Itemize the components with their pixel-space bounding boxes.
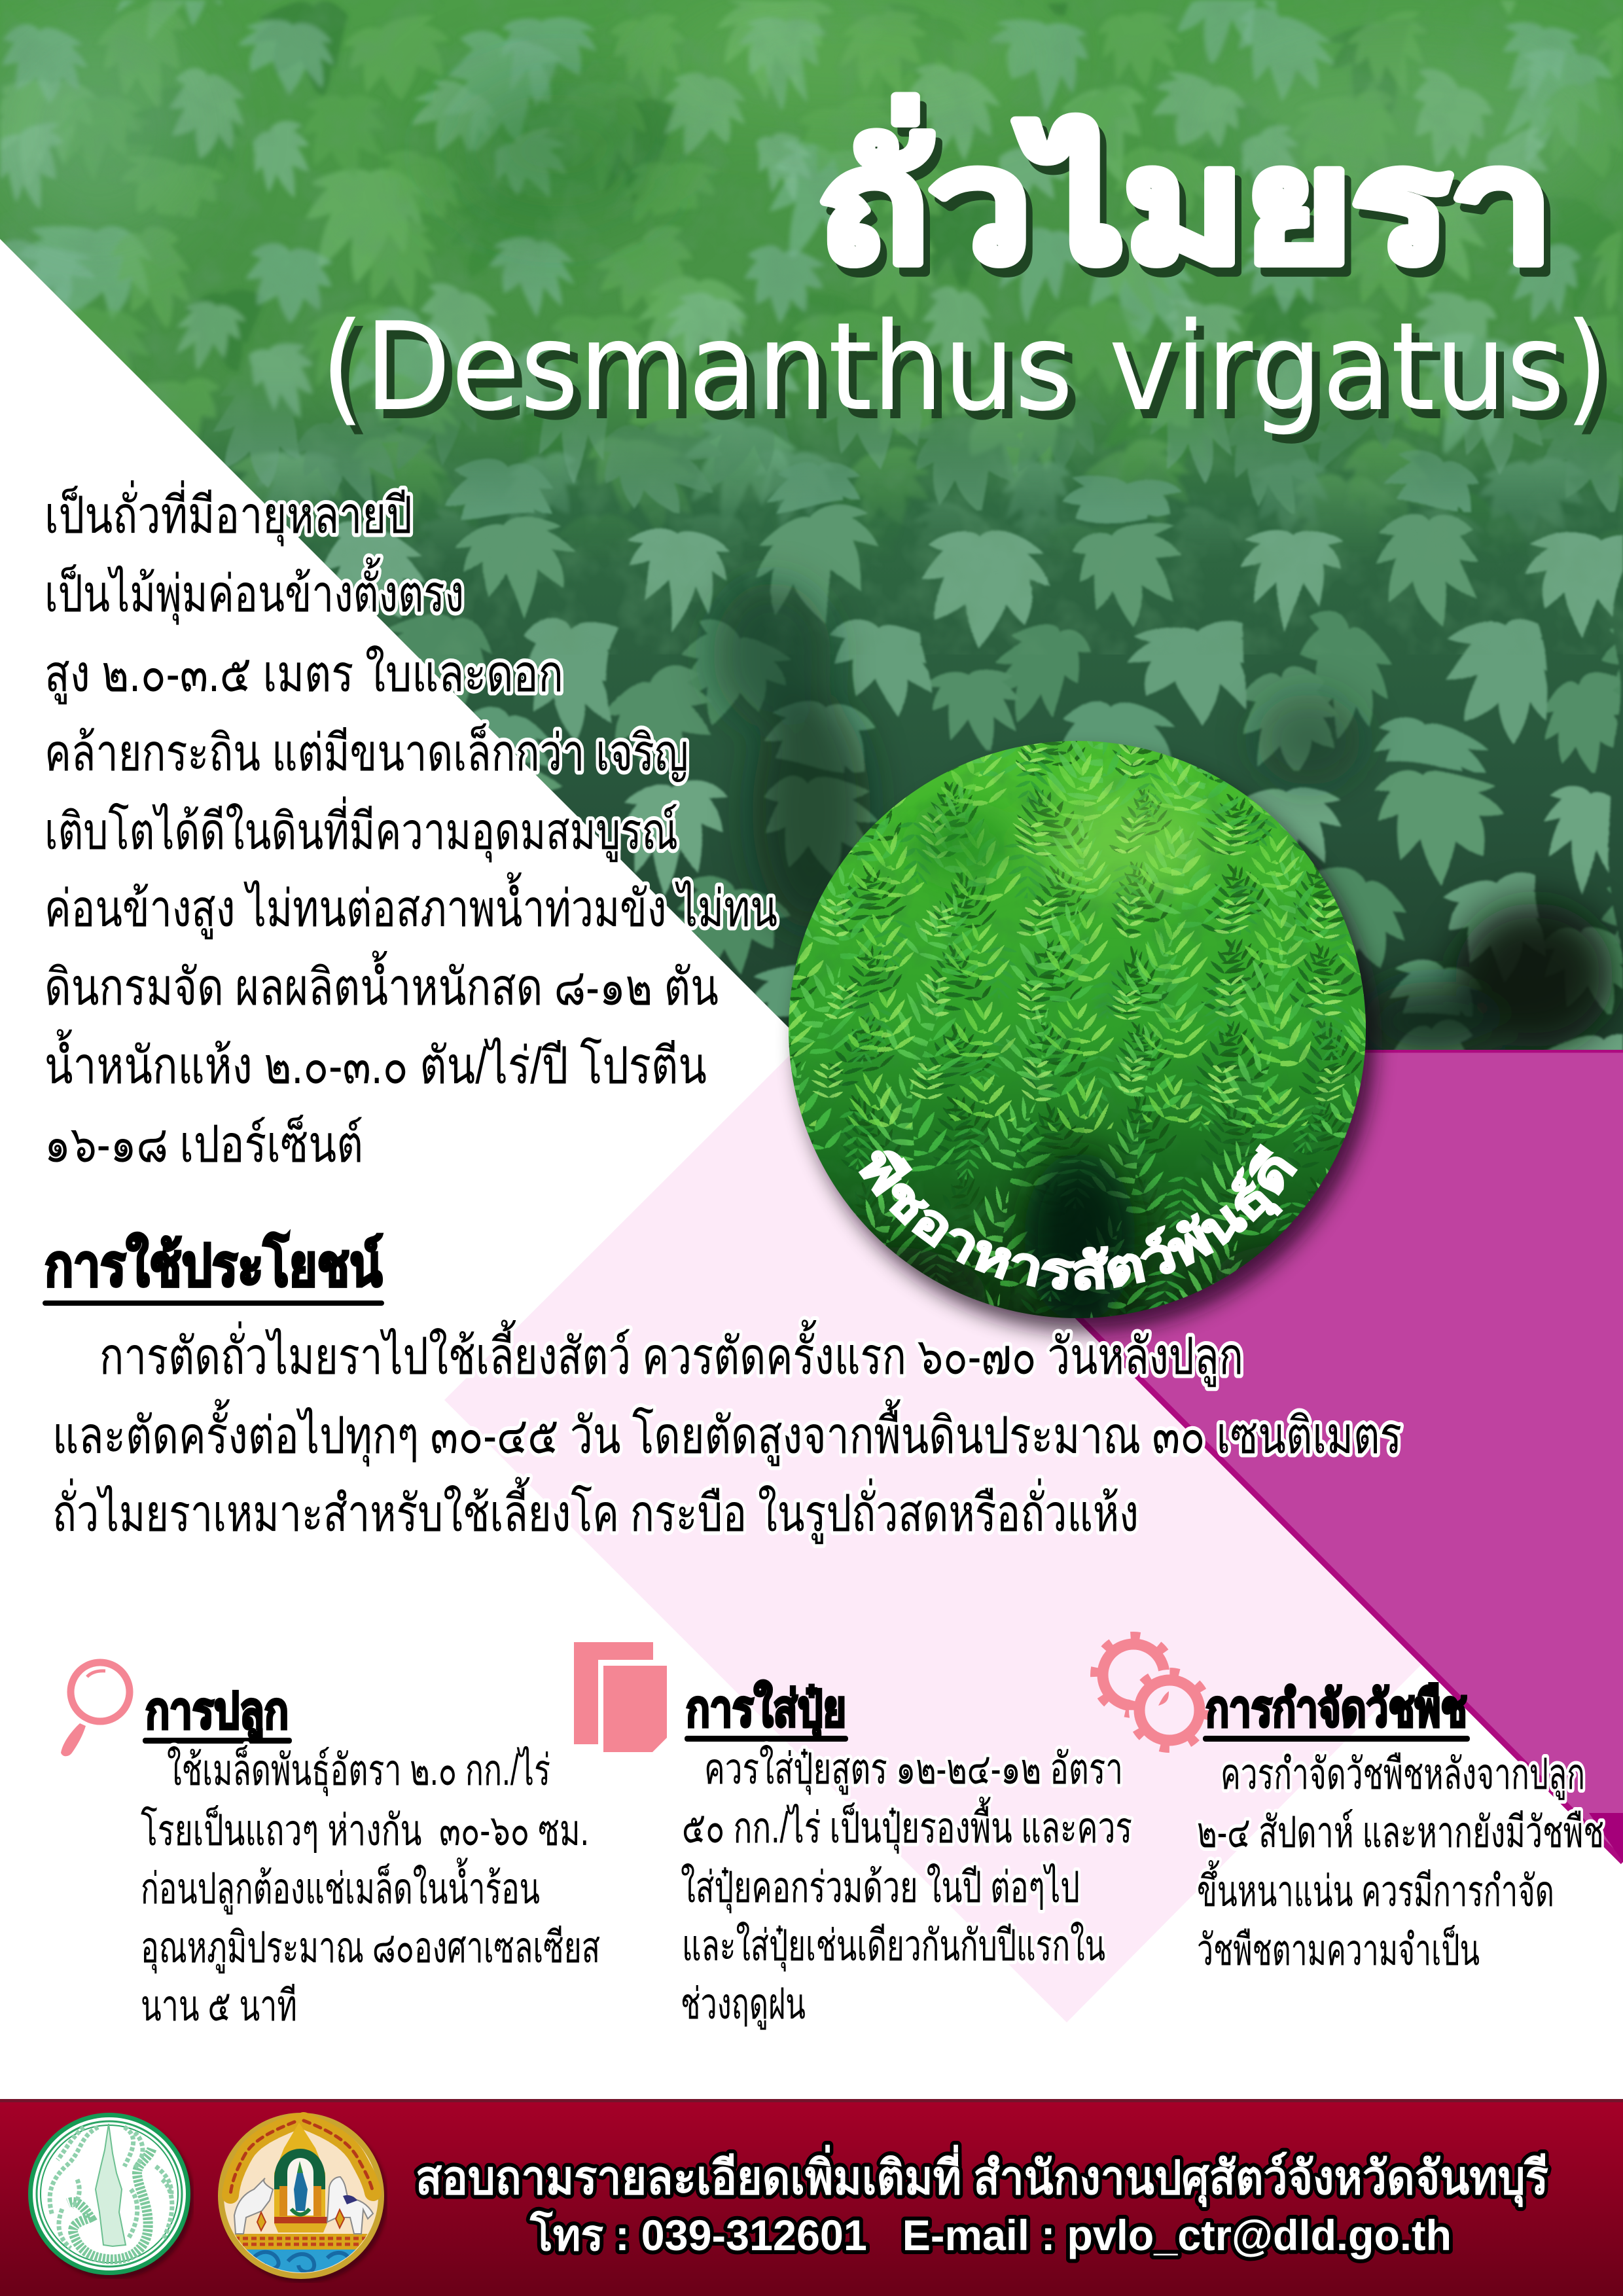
text block: plant description: ๑๖-๑๘ เปอร์เซ็นต์ — [45, 1115, 363, 1173]
footer band — [0, 2099, 1623, 2296]
photo: foliage background — [0, 0, 1623, 1060]
text block: plant description: สูง ๒.๐-๓.๕ เมตร ใบและดอก — [45, 645, 563, 704]
text block: phone and email: โทร : 039-312601 E-mail : pvlo_ctr@dld.go.th — [529, 2210, 1452, 2259]
curved label on disc: พืชอาหารสัตว์พันธุ์ดี — [859, 1143, 1298, 1291]
text block: plant description: เป็นถั่วที่มีอายุหลายปี — [45, 480, 412, 547]
heading: fertilizing: การใส่ปุ๋ย — [686, 1680, 846, 1740]
text block: benefits: ถั่วไมยราเหมาะสำหรับใช้เลี้ยงโค กระบือ ในรูปถั่วสดหรือถั่วแห้ง — [52, 1477, 1139, 1544]
panel: purple triangle — [811, 1050, 1623, 1862]
text block: fertilizing — [681, 1744, 1132, 2030]
text block: plant description: เติบโตได้ดีในดินที่มีความอุดมสมบูรณ์ — [45, 797, 678, 863]
text block: planting: ก่อนปลูกต้องแช่เมล็ดในน้ำร้อน — [141, 1857, 540, 1915]
text block: plant description: น้ำหนักแห้ง ๒.๐-๓.๐ ตัน/ไร่/ปี โปรตีน — [45, 1029, 707, 1094]
text block: planting: อุณหภูมิประมาณ ๘๐องศาเซลเซียส — [141, 1923, 600, 1974]
text block: benefits: การตัดถั่วไมยราไปใช้เลี้ยงสัตว์ ควรตัดครั้งแรก ๖๐-๗๐ วันหลังปลูก — [99, 1319, 1243, 1387]
title: ถั่วไมยรา — [825, 105, 1560, 303]
text block: plant description: คล้ายกระถิน แต่มีขนาดเล็กกว่า เจริญ — [45, 723, 688, 782]
text block: weed control: วัชพืชตามความจำเป็น — [1197, 1924, 1480, 1974]
heading: weed control: การกำจัดวัชพืช — [1205, 1681, 1467, 1737]
text block: plant description: ดินกรมจัด ผลผลิตน้ำหนักสด ๘-๑๒ ตัน — [45, 950, 719, 1016]
panel: pink diamond — [444, 1042, 1423, 2022]
text block: benefits — [52, 1319, 1402, 1544]
icon: magnifier — [61, 1662, 130, 1756]
title: ถั่วไมยรา — [818, 96, 1553, 294]
text block: planting — [141, 1744, 600, 2030]
text block: planting: โรยเป็นแถวๆ ห่างกัน ๓๐-๖๐ ซม. — [141, 1804, 589, 1854]
text block: planting: ใช้เมล็ดพันธุ์อัตรา ๒.๐ กก./ไร่ — [167, 1744, 550, 1797]
icon: gears — [1096, 1638, 1210, 1751]
text block: planting: นาน ๕ นาที — [141, 1981, 297, 2030]
text block: fertilizing: ควรใส่ปุ๋ยสูตร ๑๒-๒๔-๑๒ อัตรา — [704, 1744, 1123, 1795]
text block: plant description: เป็นไม้พุ่มค่อนข้างตั้งตรง — [45, 557, 464, 625]
photo: forage plant disc — [789, 741, 1366, 1318]
dark shaded hollows — [713, 583, 1613, 1060]
text block: weed control — [1197, 1749, 1604, 1974]
text block: fertilizing: ใส่ปุ๋ยคอกร่วมด้วย ในปี ต่อๆไป — [681, 1863, 1080, 1914]
logo: department seal — [28, 2113, 194, 2279]
text block: fertilizing: ช่วงฤดูฝน — [681, 1979, 806, 2030]
text block: fertilizing: ๕๐ กก./ไร่ เป็นปุ๋ยรองพื้น และควร — [682, 1797, 1132, 1854]
icon: documents — [574, 1642, 670, 1757]
heading: planting: การปลูก — [145, 1683, 289, 1742]
text block: contact line: สอบถามรายละเอียดเพิ่มเติมที่ สำนักงานปศุสัตว์จังหวัดจันทบุรี — [416, 2144, 1548, 2208]
text block: fertilizing: และใส่ปุ๋ยเช่นเดียวกันกับปีแรกใน — [682, 1921, 1105, 1972]
logo: provincial seal — [218, 2113, 387, 2283]
text block: plant description — [45, 480, 777, 1173]
shadow: photo disc — [798, 755, 1375, 1332]
text block: plant description: ค่อนข้างสูง ไม่ทนต่อสภาพน้ำท่วมขัง ไม่ทน — [45, 872, 777, 939]
heading: benefits: การใช้ประโยชน์ — [45, 1232, 382, 1298]
